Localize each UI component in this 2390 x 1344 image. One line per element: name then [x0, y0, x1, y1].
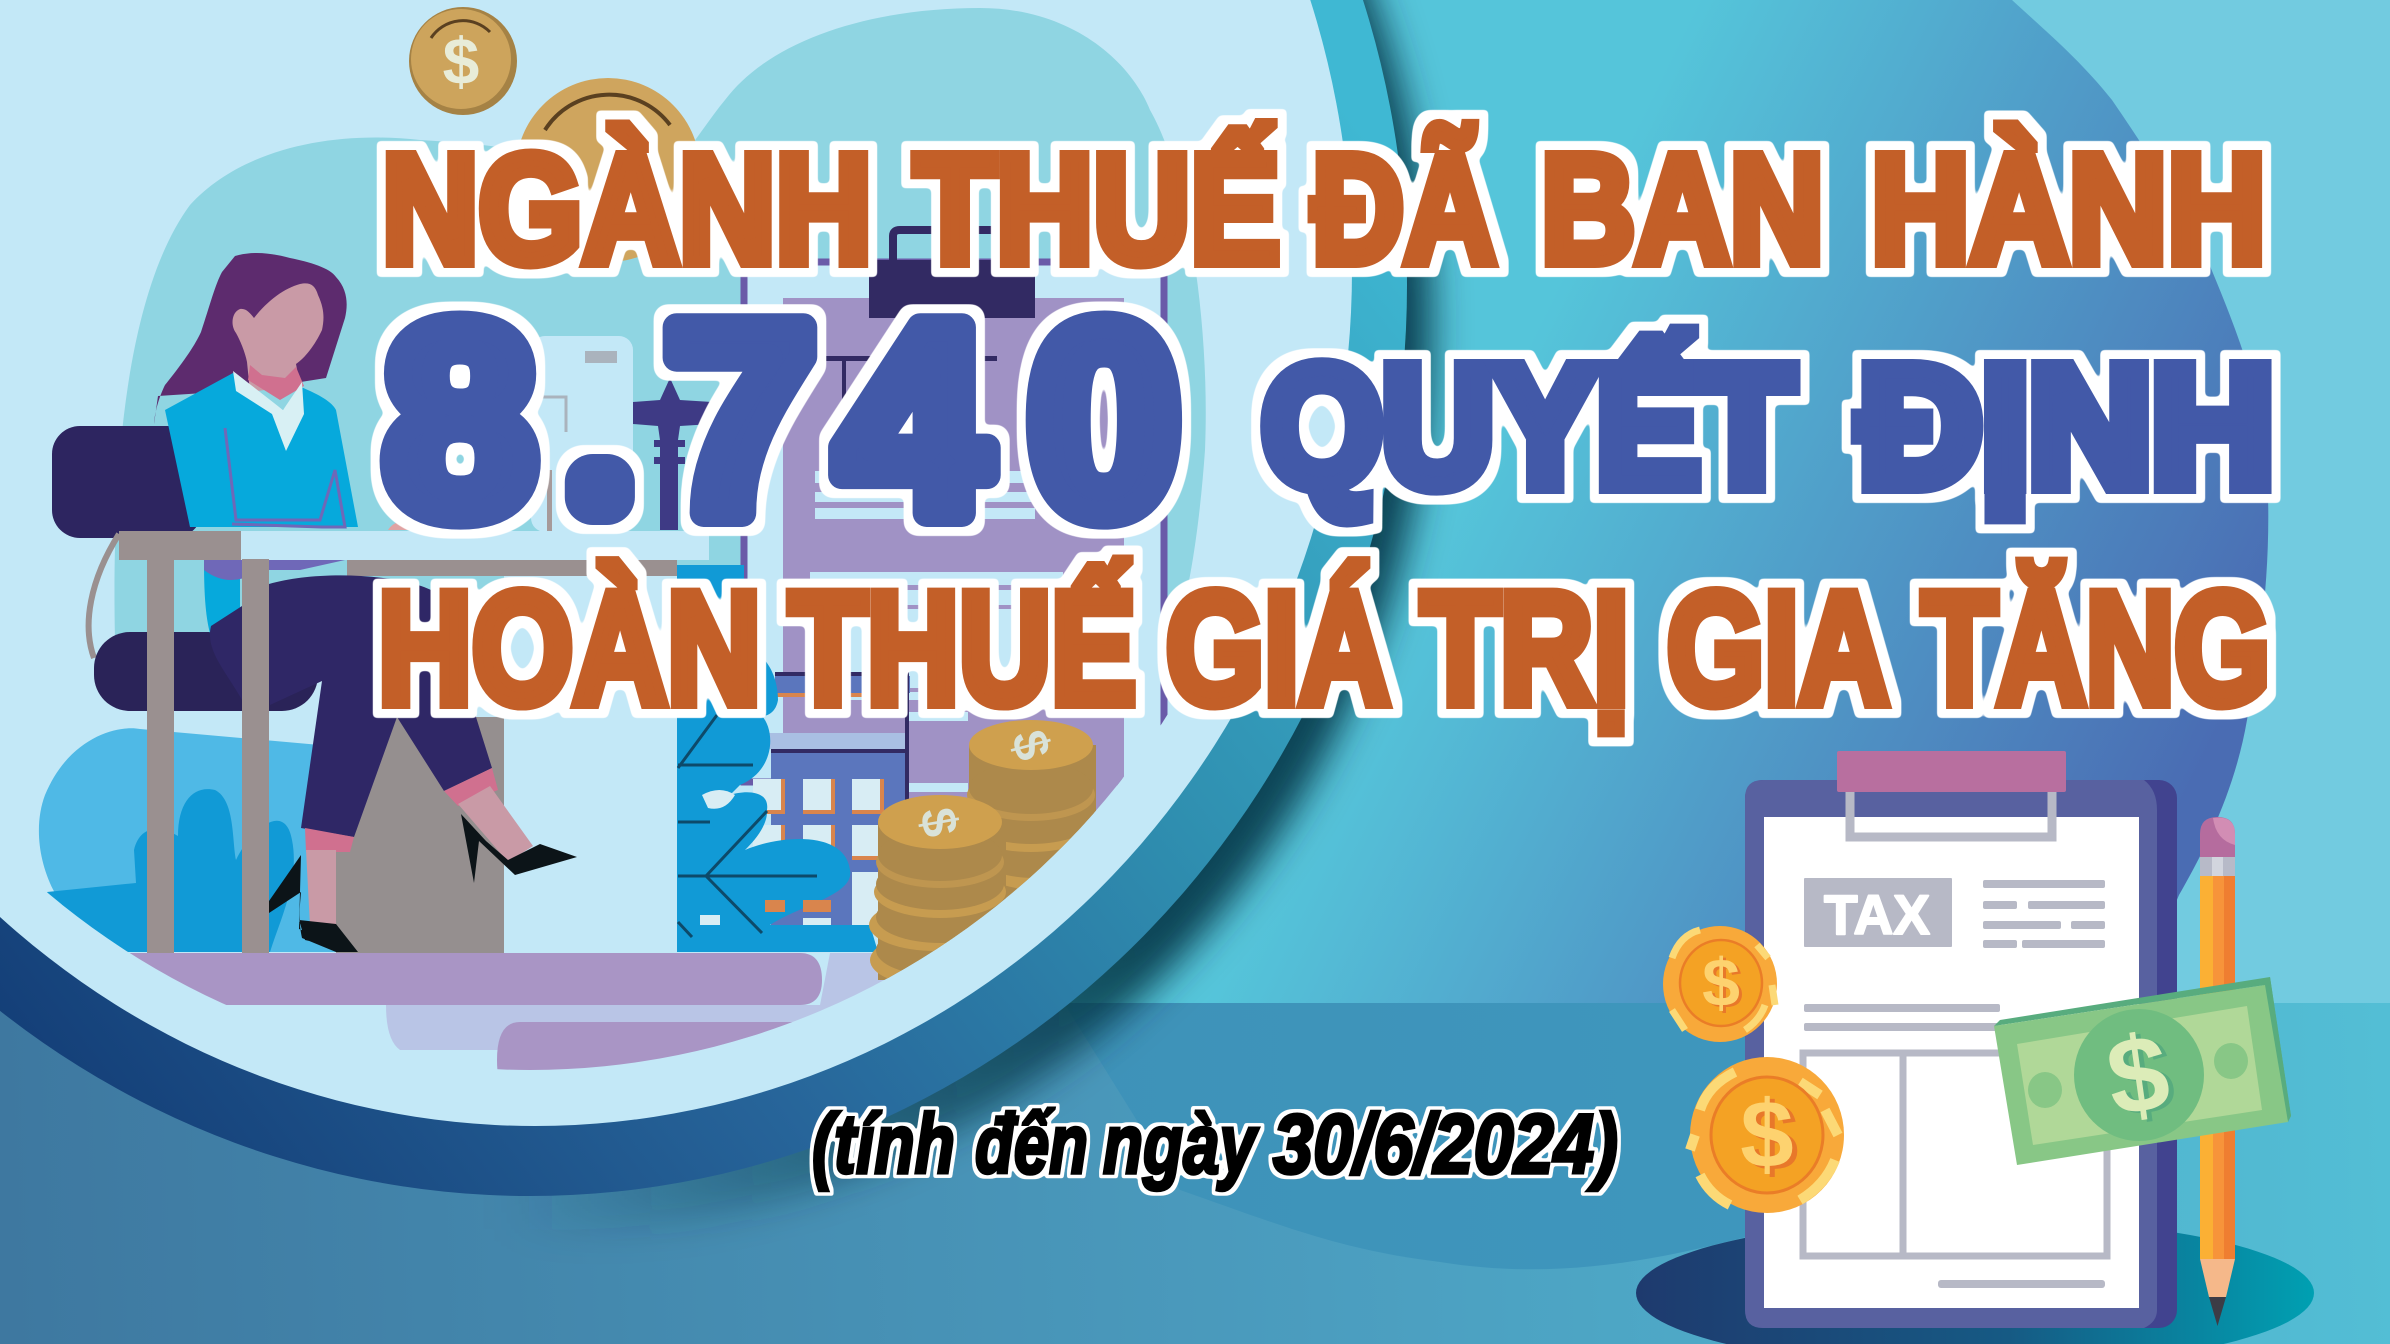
floor shapes	[107, 953, 1000, 1100]
blue sweater	[165, 373, 358, 527]
title line 1: ĐÃ	[1312, 123, 1496, 295]
coin stack front	[869, 795, 1006, 987]
title line 2: QUYẾT	[1262, 331, 1794, 522]
title line 3	[378, 559, 2270, 737]
calculator panel	[753, 672, 910, 934]
title line 1: THUẾ	[914, 123, 1280, 295]
legs	[210, 559, 577, 953]
clip wire	[1850, 790, 2052, 837]
icon: gold coin lower	[1690, 1057, 1844, 1213]
title line 3: TRỊ	[1421, 559, 1629, 737]
icon: gold coin upper	[1663, 926, 1777, 1042]
title line 2	[1262, 331, 2274, 522]
white collar	[233, 371, 304, 451]
coin stack back: $	[1000, 724, 1062, 766]
big number 8.740: 740	[665, 270, 1179, 571]
paper	[1764, 817, 2139, 1308]
date note: ngày	[1103, 1097, 1259, 1191]
title	[378, 123, 2274, 737]
title line 1: NGÀNH	[382, 123, 872, 295]
date note: (tính	[812, 1097, 955, 1191]
outer ring	[0, 0, 1407, 1196]
date note	[812, 1097, 1618, 1191]
title line 3: HOÀN	[378, 559, 761, 737]
chair	[52, 426, 318, 711]
icon: gold coin upper: $	[1705, 947, 1743, 1023]
clipboard shadow ellipse	[1636, 1218, 2314, 1344]
clip head	[1837, 751, 2066, 792]
tax box	[1804, 878, 1952, 947]
title line 1: HÀNH	[1871, 123, 2266, 295]
clipboard back	[1745, 780, 2177, 1328]
title line 3: GIÁ	[1166, 559, 1390, 737]
desk	[119, 531, 709, 953]
tax label: TAX	[1824, 883, 1930, 946]
neck and face	[233, 283, 323, 392]
title line 3: GIA	[1667, 559, 1889, 737]
hand	[388, 521, 425, 530]
hair	[154, 253, 347, 424]
big number 8.740	[385, 270, 1179, 571]
illustration: woman at desk with board and coins	[39, 7, 1206, 1100]
lamp silhouette	[633, 378, 712, 530]
title line 1: BAN	[1541, 123, 1824, 295]
clipboard board	[744, 230, 1164, 838]
icon: banknote: $	[2100, 1010, 2176, 1139]
icon: banknote: $	[2105, 1012, 2181, 1141]
icon: gold coin upper: $	[1702, 945, 1740, 1021]
teal background blobs	[114, 8, 1206, 650]
big number 8.740: 8	[385, 270, 535, 571]
date note: 30/6/2024)	[1273, 1097, 1618, 1191]
title line 2: ĐỊNH	[1859, 332, 2274, 522]
big number 8.740: .	[586, 407, 614, 519]
coin small	[409, 7, 517, 115]
title line 1	[382, 123, 2266, 295]
icon: tax clipboard	[1745, 751, 2177, 1328]
coin large	[516, 78, 700, 262]
coin stack front: $	[909, 804, 969, 841]
icon: banknote	[1994, 977, 2291, 1165]
left blue plant blob	[39, 728, 345, 952]
table outline	[1803, 1053, 2107, 1256]
title line 3: THUẾ	[789, 559, 1136, 737]
icon: pencil	[2200, 817, 2235, 1326]
icon: gold coin lower: $	[1745, 1084, 1799, 1191]
title line 3: TĂNG	[1922, 559, 2270, 737]
icon: gold coin lower: $	[1740, 1081, 1794, 1188]
text lines	[1804, 880, 2105, 1288]
light circle panel	[0, 0, 1352, 1126]
coin small: $	[443, 24, 479, 98]
date note: đến	[975, 1097, 1088, 1191]
woman	[154, 253, 425, 644]
coin stack back	[965, 720, 1106, 920]
right plant	[676, 565, 878, 952]
ring shadow	[0, 0, 1432, 1230]
monitor	[530, 336, 633, 532]
cabinet	[336, 575, 677, 953]
